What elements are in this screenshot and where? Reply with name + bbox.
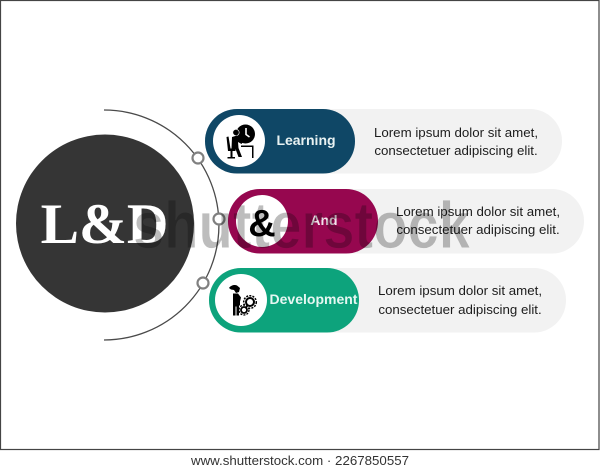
description pill: Development xyxy=(209,268,566,332)
connector node 2 xyxy=(214,214,224,224)
watermark: shutterstock xyxy=(133,188,470,262)
description pill: Learning: consectetuer adipiscing elit. xyxy=(374,143,538,158)
label pill: Learning: Learning xyxy=(276,132,336,148)
connector arc xyxy=(104,110,219,340)
icon: person with gears xyxy=(229,285,256,316)
icon: ampersand: & xyxy=(248,203,276,245)
row 2: And xyxy=(228,189,584,254)
icon: person at desk with clock xyxy=(226,124,255,158)
central circle with L&D heading: L&D xyxy=(41,193,168,256)
description pill: And: consectetuer adipiscing elit. xyxy=(396,222,560,237)
row 3: Development xyxy=(209,268,566,332)
connector node 1 xyxy=(192,152,204,164)
description pill: Learning: Lorem ipsum dolor sit amet, xyxy=(374,125,538,140)
label pill: Learning xyxy=(205,109,355,174)
footer source line: www.shutterstock.com · 2267850557 xyxy=(190,453,409,468)
description pill: Development: consectetuer adipiscing elit. xyxy=(378,302,542,317)
central circle with L&D heading xyxy=(16,134,194,312)
row 1: Learning xyxy=(205,109,562,174)
label pill: And: And xyxy=(310,212,338,228)
label pill: Development: Development xyxy=(270,291,358,307)
description pill: Learning xyxy=(205,109,562,174)
description pill: And xyxy=(228,189,584,254)
label pill: Development xyxy=(209,268,359,332)
description pill: And: Lorem ipsum dolor sit amet, xyxy=(396,204,560,219)
connector node 3 xyxy=(198,278,208,288)
label pill: And xyxy=(228,189,378,254)
description pill: Development: Lorem ipsum dolor sit amet, xyxy=(378,283,542,298)
